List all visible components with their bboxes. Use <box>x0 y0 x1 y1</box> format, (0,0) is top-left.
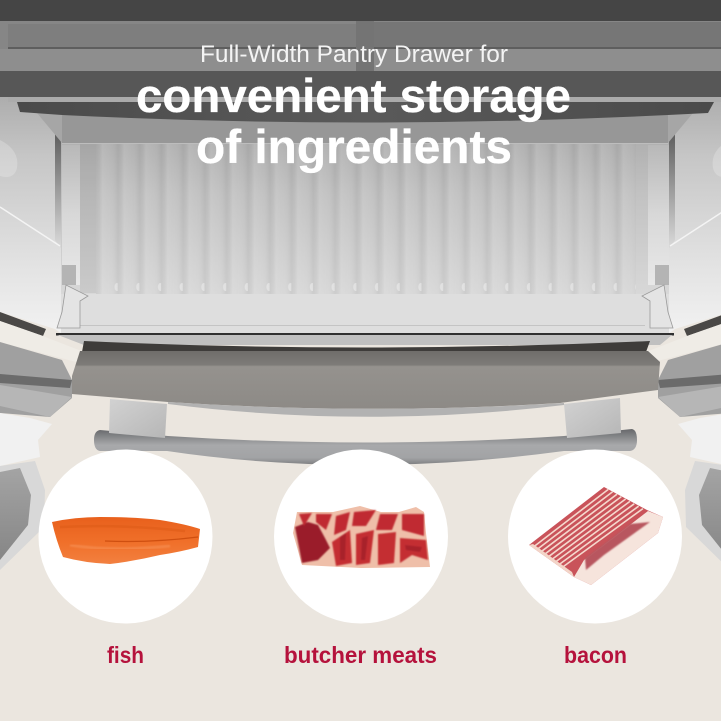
panel: right door wall and bin <box>646 97 721 570</box>
right bracket <box>564 398 621 438</box>
panel: refrigerator top shelves <box>0 0 721 97</box>
panel: bacon circle <box>508 450 682 624</box>
panel: fish circle <box>38 450 212 624</box>
text block: subtitle: Full-Width Pantry Drawer for <box>200 41 508 68</box>
icon: pork slab <box>293 506 430 568</box>
left bracket <box>109 399 167 438</box>
icon: bacon slices <box>529 487 663 585</box>
panel: drawer front <box>56 333 674 417</box>
label: fish: fish <box>107 642 144 668</box>
tray clips <box>62 265 76 285</box>
light shelf edge <box>8 97 721 102</box>
label: bacon: bacon <box>564 642 627 668</box>
panel: butcher meats circle <box>274 450 448 624</box>
heading: line two: of ingredients <box>196 120 512 173</box>
label: butcher meats: butcher meats <box>284 642 437 668</box>
icon: salmon fillet <box>52 517 200 564</box>
panel: left door wall and bin <box>0 97 84 570</box>
panel: drawer interior <box>8 97 721 333</box>
glass side pieces <box>37 113 62 143</box>
icon: drawer handle <box>94 398 637 465</box>
heading: line one: convenient storage <box>136 69 571 122</box>
dark shelf underside <box>17 102 714 122</box>
